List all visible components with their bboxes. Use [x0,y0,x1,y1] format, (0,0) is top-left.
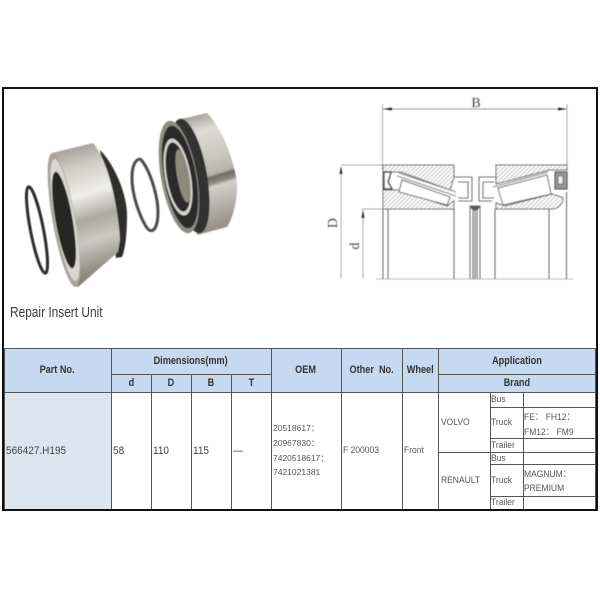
header: Dimensions [111,348,271,374]
icon: snap ring [132,159,158,231]
dimension B: B [471,96,481,111]
header: OEM [271,348,341,392]
illustration: repair insert unit bearing parts [24,112,238,288]
header: d: d [128,377,134,389]
cell: OEM numbers: 7420518617： [273,452,329,462]
header: Brand: Brand [504,377,530,389]
cell: T value: — [233,444,243,456]
header: T: T [248,377,254,389]
cell: Volvo truck models: FM12： FM9 [524,426,574,438]
technical drawing: bearing cross-section [326,96,574,280]
dimension D: D [326,218,341,228]
icon: right bearing [151,113,237,236]
cell: d value: 58 [113,444,124,456]
cell: Volvo truck models [524,412,575,438]
cell: RENAULT: RENAULT [441,475,480,486]
header: d [111,374,151,392]
cell: Volvo truck: Truck [491,417,512,428]
cell: D value: 110 [153,444,169,456]
specification table [4,348,596,509]
cell: part number: 566427.H195 [6,444,66,456]
cell: OEM numbers: 20518617： [273,423,319,433]
cell: part number [4,392,111,509]
header: B [191,374,231,392]
cell: Renault bus: Bus [491,452,506,464]
header: Other No.: Other No. [349,364,394,376]
header: Dimensions: Dimensions(mm) [154,355,228,367]
dimension d: d [348,242,363,250]
cell: Volvo bus: Bus [491,394,506,405]
outer frame [2,87,598,511]
cell: wheel: Front [404,445,424,456]
cell: B value: 115 [193,444,209,456]
cell: OEM numbers: 7421021381 [273,467,320,477]
cell: Renault truck: Truck [491,474,512,486]
cell: other number: F 200003 [343,445,379,456]
header: Other No. [341,348,402,392]
dimension d [348,209,383,279]
cell: Renault truck models: PREMIUM [524,482,564,494]
icon: left bearing [41,143,127,289]
vertical rules [111,348,112,509]
header: D: D [168,377,174,389]
header: Application: Application [492,355,542,367]
header: Brand [438,374,596,392]
header: Wheel [402,348,438,392]
right bearing section [479,165,567,209]
header: Part No. [4,348,111,392]
cell: Renault trailer: Trailer [491,497,515,508]
header: Part No.: Part No. [40,364,75,376]
shaft and spacer lines [376,165,573,279]
header: D [151,374,191,392]
dimension B [382,96,567,170]
cell: Volvo truck models: FE： FH12： [524,412,575,422]
header: T [231,374,271,392]
dimension D [326,165,383,279]
cell: OEM numbers [273,423,329,477]
header: OEM: OEM [296,364,316,376]
header: B: B [208,377,214,389]
left bearing section [383,165,472,209]
cell: Renault truck models [524,468,571,494]
header: Wheel: Wheel [407,364,433,376]
icon: left o-ring [22,186,52,274]
cell: VOLVO: VOLVO [441,416,470,428]
cell: Renault truck models: MAGNUM： [524,468,571,480]
caption: Repair Insert Unit: Repair Insert Unit [10,305,103,321]
header: Application [438,348,596,374]
cell: OEM numbers: 20967830： [273,438,319,448]
cell: Volvo trailer: Trailer [491,440,515,450]
